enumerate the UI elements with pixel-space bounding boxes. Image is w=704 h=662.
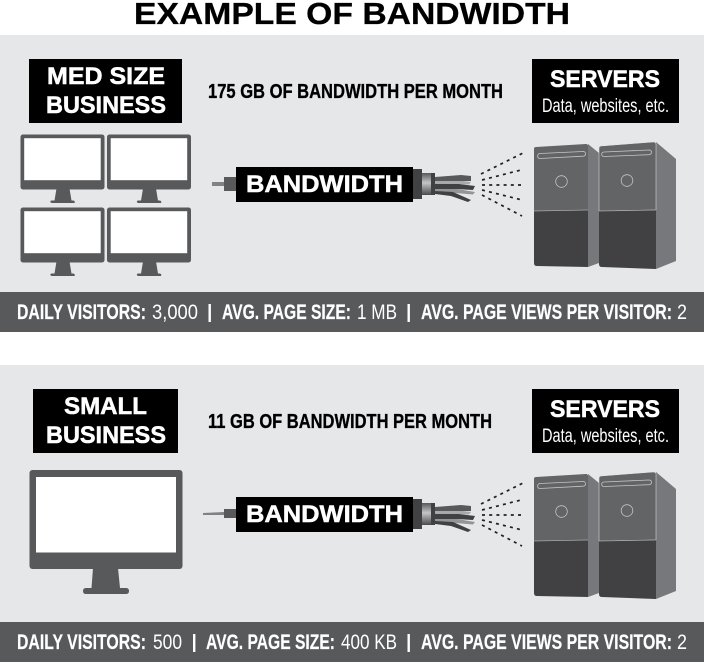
stats bar: small business: DAILY VISITORS: xyxy=(17,631,146,654)
bandwidth amount text: 175 GB OF BANDWIDTH PER MONTH xyxy=(208,81,503,103)
panel: small business xyxy=(0,365,704,622)
stats bar: medium business: 2 xyxy=(677,301,687,324)
stats bar: medium business: DAILY VISITORS: xyxy=(17,301,146,324)
label: med size business: MED SIZE xyxy=(47,63,165,90)
label: servers: Data, websites, etc. xyxy=(542,96,669,117)
label: servers: SERVERS xyxy=(550,66,660,93)
stats bar: small business: 500 xyxy=(153,631,182,654)
label: servers: Data, websites, etc. xyxy=(542,426,669,447)
icon: bandwidth cable: BANDWIDTH xyxy=(246,501,403,528)
panel: medium size business xyxy=(0,35,704,292)
label: small business: SMALL xyxy=(64,393,147,420)
label: small business xyxy=(33,389,178,453)
icon: bandwidth cable xyxy=(212,167,475,202)
icon: data rays xyxy=(481,483,523,546)
stats bar: small business: AVG. PAGE SIZE: xyxy=(206,631,335,654)
stats bar: small business xyxy=(0,622,704,662)
stats bar: medium business: AVG. PAGE SIZE: xyxy=(222,301,351,324)
stats bar: small business: 2 xyxy=(677,631,687,654)
stats bar: medium business: 1 MB xyxy=(357,301,397,324)
label: med size business xyxy=(29,59,182,123)
icon: four desktop monitors xyxy=(20,134,191,276)
stats bar: small business: 400 KB xyxy=(341,631,397,654)
label: servers xyxy=(532,59,679,123)
icon: bandwidth cable xyxy=(203,497,475,532)
icon: data rays xyxy=(481,153,523,216)
icon: bandwidth cable: BANDWIDTH xyxy=(246,171,403,198)
stats bar: medium business: 3,000 xyxy=(152,301,198,324)
label: servers xyxy=(532,389,679,453)
icon: single desktop monitor xyxy=(30,470,182,594)
bandwidth amount text: 11 GB OF BANDWIDTH PER MONTH xyxy=(208,411,492,433)
label: med size business: BUSINESS xyxy=(46,92,166,119)
label: small business: BUSINESS xyxy=(46,422,166,449)
label: servers: SERVERS xyxy=(550,396,660,423)
icon: server towers xyxy=(534,472,676,599)
icon: server towers xyxy=(534,142,676,269)
stats bar: medium business xyxy=(0,292,704,332)
